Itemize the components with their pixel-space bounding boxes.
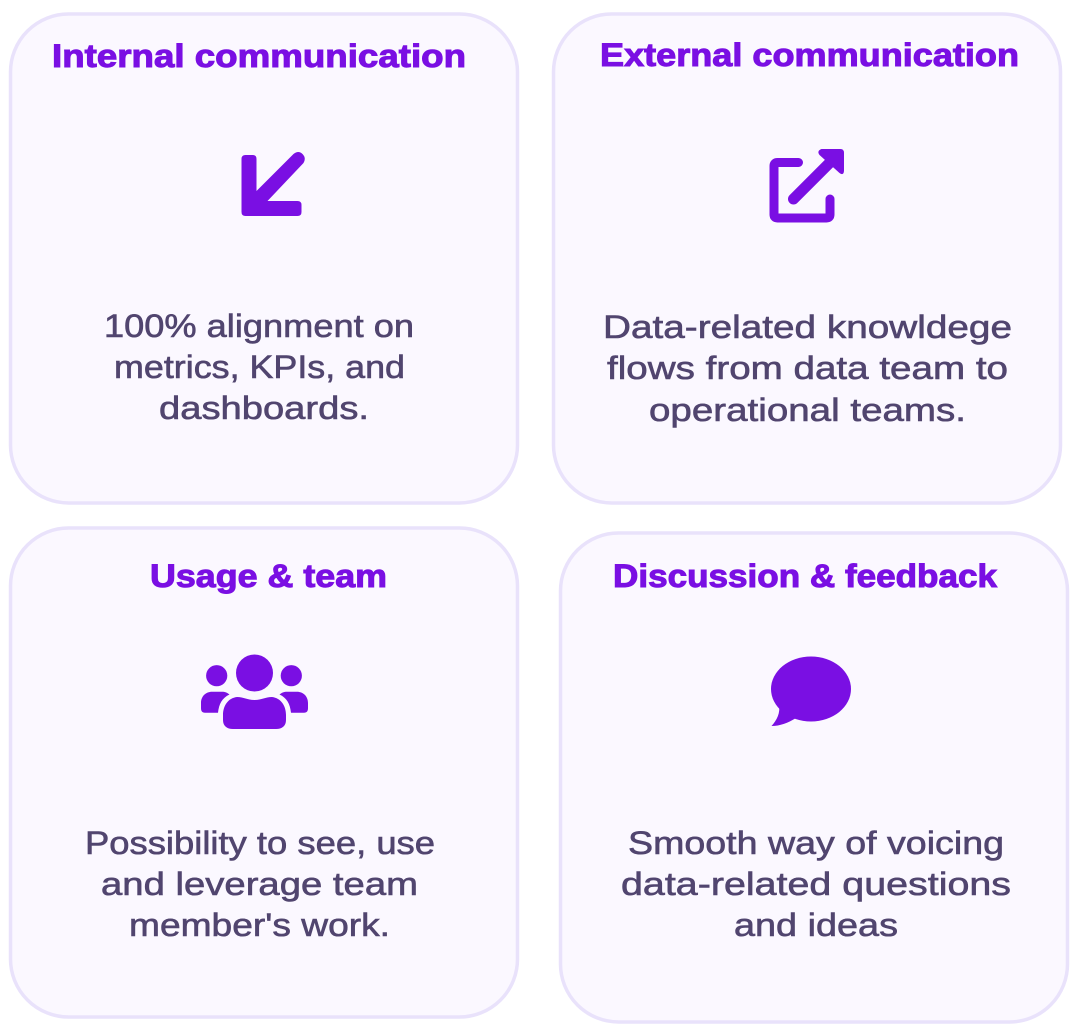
heading: internal communication: Internal communication: [52, 38, 466, 74]
text block: Possibility to see, use: [85, 825, 435, 861]
card background: [554, 14, 1060, 503]
text block: [104, 308, 414, 426]
text block: [603, 309, 1012, 428]
card background: [10, 14, 518, 503]
text block: 100% alignment on: [104, 308, 414, 344]
icon: external link arrow: [774, 149, 844, 218]
panel: external communication: [554, 14, 1060, 503]
text block: operational teams.: [649, 392, 966, 428]
icon: speech bubble: [771, 656, 851, 726]
text block: member's work.: [129, 907, 390, 943]
text block: [621, 825, 1011, 943]
text block: dashboards.: [159, 390, 369, 426]
panel: discussion and feedback: [560, 533, 1068, 1022]
text block: and ideas: [734, 907, 898, 943]
icon: arrow pointing down-left: [242, 152, 305, 216]
text block: Smooth way of voicing: [628, 825, 1004, 861]
text block: [85, 825, 435, 943]
heading: discussion and feedback: Discussion & feedback: [613, 558, 997, 594]
icon: team of three people: [201, 654, 308, 729]
panel: internal communication: [10, 14, 518, 503]
text block: Data-related knowldege: [603, 309, 1012, 345]
heading: external communication: External communication: [600, 37, 1019, 73]
text block: flows from data team to: [607, 350, 1008, 386]
text block: data-related questions: [621, 866, 1011, 902]
heading: usage and team: Usage & team: [150, 558, 387, 594]
panel: usage and team: [10, 528, 518, 1017]
card background: [560, 533, 1068, 1022]
text block: and leverage team: [101, 866, 418, 902]
text block: metrics, KPIs, and: [114, 349, 405, 385]
card background: [10, 528, 518, 1017]
